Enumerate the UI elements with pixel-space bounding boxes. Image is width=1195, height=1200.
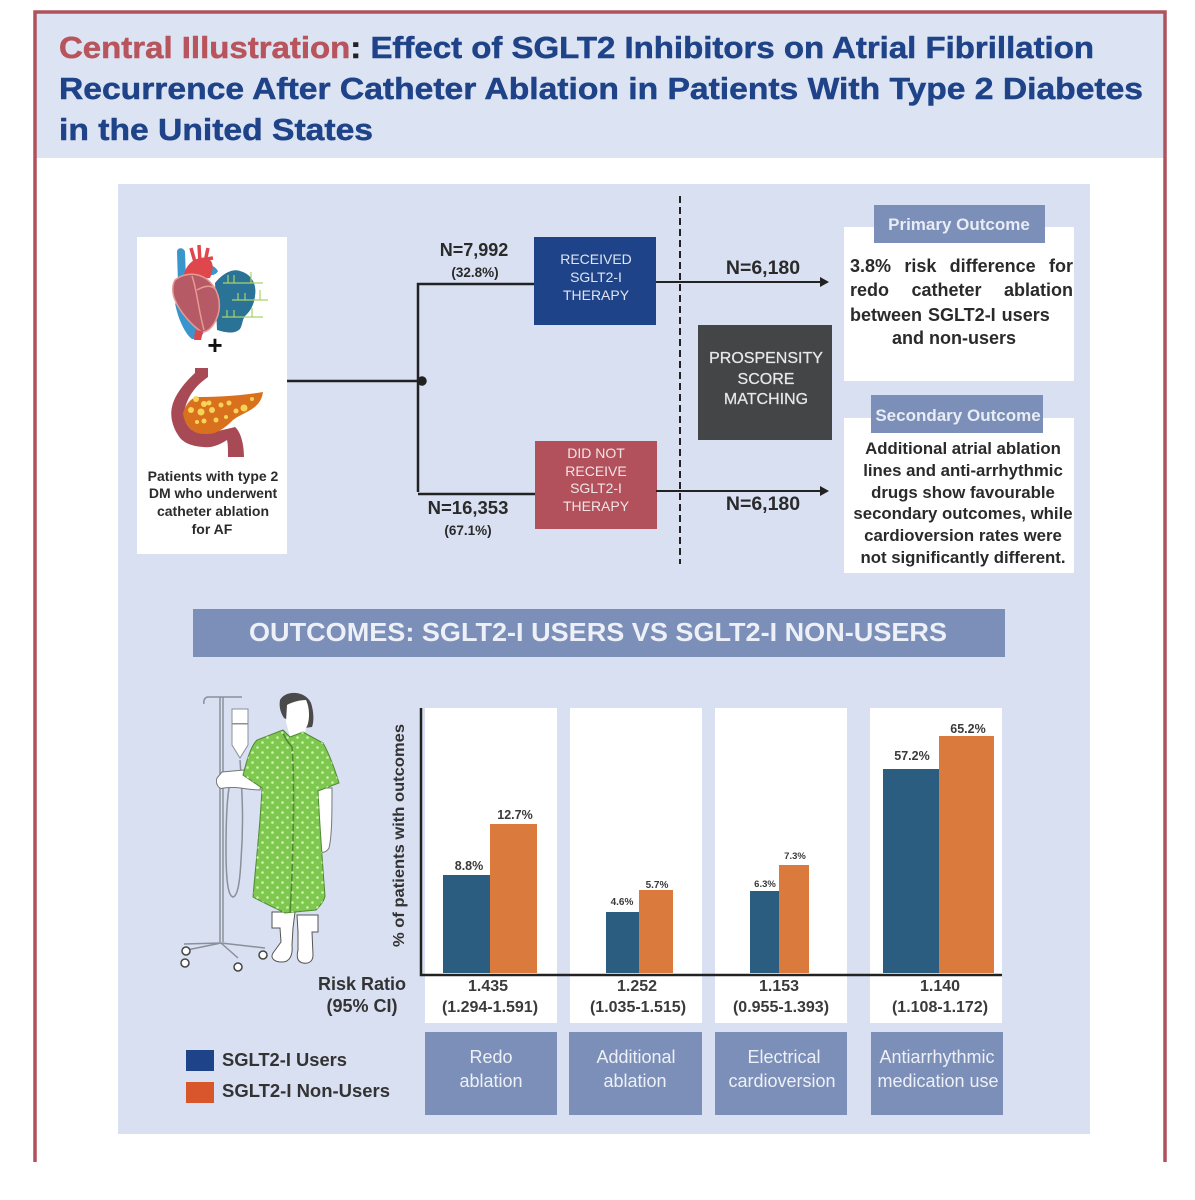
panel: secondary outcome: cardioversion rates were: [864, 526, 1062, 545]
icon: heart with atrial fibrillation: [173, 245, 268, 340]
text: received group count: [440, 240, 508, 280]
bar chart: additional ablation: [606, 880, 673, 973]
risk ratio row label: Risk Ratio: [318, 974, 406, 994]
bar chart: electrical cardioversion: 7.3%: [784, 851, 806, 862]
icon: patient with IV pole: [181, 693, 339, 971]
risk ratio values: [442, 978, 988, 1016]
chart axes: [421, 708, 1002, 975]
category label: additional ablation: ablation: [603, 1071, 667, 1091]
text: not received group count: (67.1%): [444, 523, 492, 538]
panel: secondary outcome: secondary outcomes, while: [853, 504, 1073, 523]
panel: primary outcome: Primary Outcome: [888, 215, 1030, 234]
box: did not receive SGLT2-I therapy: RECEIVE: [565, 463, 627, 479]
risk ratio values: (1.294-1.591): [442, 999, 538, 1016]
legend: SGLT2-I Non-Users: [222, 1081, 390, 1101]
panel: secondary outcome: not significantly different.: [860, 548, 1066, 567]
panel: primary outcome: [844, 205, 1074, 381]
box: propensity score matching: SCORE: [738, 371, 794, 388]
box: propensity score matching: MATCHING: [724, 391, 808, 408]
legend: SGLT2-I Users: [222, 1050, 347, 1070]
category label: antiarrhythmic medication use: medication use: [877, 1071, 999, 1091]
text: patient description: DM who underwent: [149, 485, 277, 501]
title: Central Illustration : Effect of SGLT2 Inhibitors on Atrial Fibrillation: [59, 31, 1094, 65]
category label: electrical cardioversion: cardioversion: [728, 1071, 836, 1091]
legend: [186, 1050, 390, 1103]
heading: outcomes: [193, 609, 1005, 657]
panel: patients: [137, 237, 287, 554]
category label: antiarrhythmic medication use: Antiarrhythmic: [879, 1047, 995, 1067]
risk ratio values: (0.955-1.393): [733, 999, 829, 1016]
box: did not receive SGLT2-I therapy: [535, 441, 657, 529]
title: in the United States: [59, 113, 373, 147]
text: received group count: N=7,992: [440, 240, 508, 260]
arrow: received to matched cohort: N=6,180: [726, 257, 800, 279]
category label: redo ablation: ablation: [459, 1071, 523, 1091]
text: patient description: Patients with type 2: [148, 468, 279, 484]
icon: plus: +: [207, 330, 223, 360]
category label: electrical cardioversion: Electrical: [747, 1047, 821, 1067]
text: not received group count: [428, 497, 508, 538]
bar chart: additional ablation: 5.7%: [646, 880, 669, 891]
text: not received group count: N=16,353: [428, 497, 508, 518]
panel: secondary outcome: drugs show favourable: [871, 483, 1055, 502]
risk ratio values: (1.035-1.515): [590, 999, 686, 1016]
risk ratio row label: (95% CI): [326, 996, 398, 1016]
icon: pancreas: [171, 368, 263, 457]
panel: secondary outcome: [844, 395, 1074, 573]
bar chart: electrical cardioversion: [750, 851, 809, 973]
bar chart: additional ablation: 4.6%: [611, 897, 634, 908]
risk ratio values: 1.153: [759, 978, 799, 995]
arrow: received to matched cohort: [656, 257, 829, 287]
panel: primary outcome: and non-users: [892, 328, 1016, 348]
category label: additional ablation: Additional: [596, 1047, 676, 1067]
title: Recurrence After Catheter Ablation in Patients With Type 2 Diabetes: [59, 72, 1143, 106]
bar chart: redo ablation: [443, 808, 537, 973]
main panel background: [118, 184, 1090, 1134]
dashed divider: [679, 196, 681, 564]
text: patient description: for AF: [192, 521, 233, 537]
bar chart: antiarrhythmic medication use: [883, 722, 994, 973]
category label: additional ablation: [569, 1032, 702, 1115]
box: received SGLT2-I therapy: THERAPY: [563, 287, 630, 303]
risk ratio values: 1.140: [920, 978, 960, 995]
panel: primary outcome: 3.8% risk difference for: [850, 256, 1073, 276]
flow connector lines: [287, 284, 535, 494]
y-axis label: % of patients with outcomes: [391, 724, 408, 947]
box: received SGLT2-I therapy: RECEIVED: [560, 251, 632, 267]
panel: primary outcome: redo catheter ablation: [850, 280, 1073, 300]
risk ratio row label: [318, 974, 406, 1016]
category label: antiarrhythmic medication use: [871, 1032, 1003, 1115]
panel: secondary outcome: Additional atrial ablation: [865, 439, 1061, 458]
category label: redo ablation: [425, 1032, 557, 1115]
box: propensity score matching: PROSPENSITY: [709, 350, 823, 367]
arrow: not received to matched cohort: [656, 486, 829, 515]
bar chart: antiarrhythmic medication use: 65.2%: [950, 722, 986, 736]
category label: electrical cardioversion: [715, 1032, 847, 1115]
box: received SGLT2-I therapy: [534, 237, 656, 325]
risk ratio values: 1.435: [468, 978, 508, 995]
box: did not receive SGLT2-I therapy: DID NOT: [567, 445, 625, 461]
panel: secondary outcome: lines and anti-arrhythmic: [863, 461, 1063, 480]
panel: primary outcome: between SGLT2-I users: [850, 305, 1050, 325]
title: [59, 31, 1143, 147]
text: received group count: (32.8%): [451, 265, 499, 280]
risk ratio values: 1.252: [617, 978, 657, 995]
box: did not receive SGLT2-I therapy: SGLT2-I: [570, 480, 622, 496]
bar chart: antiarrhythmic medication use: 57.2%: [894, 749, 930, 763]
box: did not receive SGLT2-I therapy: THERAPY: [563, 498, 630, 514]
box: propensity score matching: [698, 325, 832, 440]
panel: secondary outcome: Secondary Outcome: [875, 406, 1041, 425]
bar chart: electrical cardioversion: 6.3%: [754, 879, 776, 890]
arrow: not received to matched cohort: N=6,180: [726, 493, 800, 515]
box: received SGLT2-I therapy: SGLT2-I: [570, 269, 622, 285]
bar chart: redo ablation: 8.8%: [455, 859, 483, 873]
risk ratio values: (1.108-1.172): [892, 999, 988, 1016]
category label: redo ablation: Redo: [469, 1047, 513, 1067]
bar chart: redo ablation: 12.7%: [497, 808, 533, 822]
chart panels: [425, 708, 1002, 1023]
heading: outcomes: OUTCOMES: SGLT2-I USERS VS SGLT2-I NON-USERS: [249, 617, 947, 647]
text: patient description: catheter ablation: [157, 503, 269, 519]
text: patient description: [148, 468, 279, 537]
